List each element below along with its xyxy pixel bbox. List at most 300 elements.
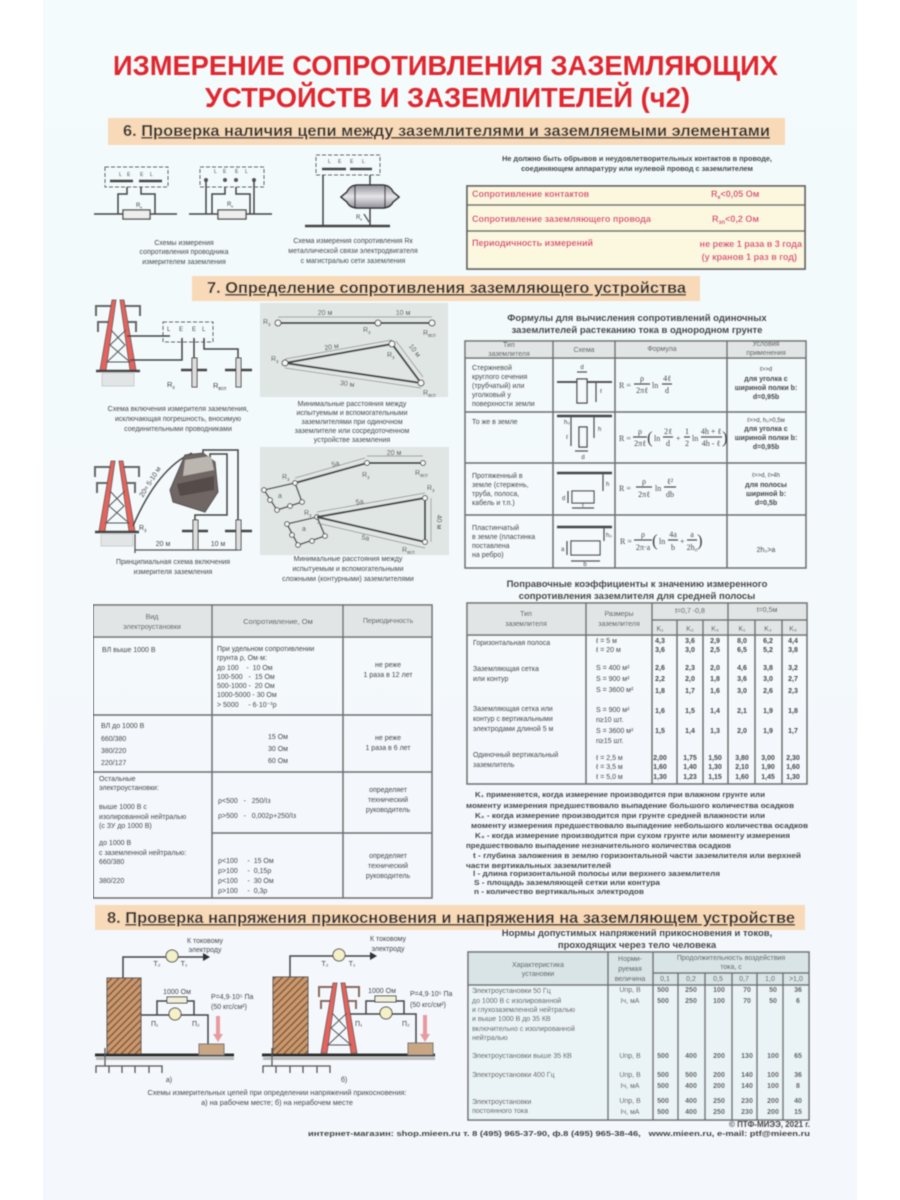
section heading 7: 7. Определение сопротивления заземляющего устройства: [207, 280, 686, 297]
coefficient values: 1,30: [708, 764, 722, 771]
diagram: principal meter connection: 10 м: [211, 541, 225, 548]
coefficient values: 1,6: [655, 708, 665, 715]
caption: conductor circuits: сопротивления проводника: [140, 249, 229, 256]
panel: minimum distances complex electrode: з: [367, 475, 370, 481]
panel: minimum distances single electrode: 20 м: [324, 343, 340, 352]
panel: minimum distances single electrode: з: [276, 359, 279, 365]
diagram: conductor measurement circuit 1: R: [136, 203, 140, 209]
diagram: conductor measurement circuit 1: [94, 167, 177, 219]
formulas: ln: [655, 484, 661, 493]
requirements box: <0,05 Ом: [721, 189, 760, 199]
header: установки: [522, 971, 554, 978]
coefficient values: 1,7: [685, 688, 695, 695]
diagram b: touch voltage at non-work place: T₁: [349, 961, 356, 968]
icon: voltmeter: [169, 1008, 181, 1020]
conditions column: для уголка с: [744, 426, 788, 433]
header: величина: [615, 976, 645, 983]
conditions column: ℓ>>d: [760, 366, 772, 373]
installation types: ВЛ до 1000 В: [101, 723, 145, 730]
values: 100: [713, 987, 725, 994]
values: 230: [741, 1098, 753, 1105]
scheme sketches: h₀: [564, 420, 570, 426]
table: resistance norms: [93, 605, 432, 898]
table header: [488, 341, 786, 358]
values: 70: [743, 987, 751, 994]
diagram a: touch voltage at workplace: 1000 Ом: [163, 989, 191, 996]
resistance values: 100-500 - 15 Ом: [217, 674, 275, 681]
panel: minimum distances single electrode: з: [368, 330, 371, 336]
diagram: tower with meter: L: [202, 327, 206, 333]
earth electrode types: [473, 640, 558, 769]
diagram: tower with meter: R: [167, 380, 172, 389]
diagram b: touch voltage at non-work place: П₁: [355, 1021, 363, 1028]
coefficient values: 3,0: [763, 676, 773, 683]
values: 500: [657, 1109, 669, 1116]
resistance values: ρ<500 - 250/Iз: [218, 798, 271, 805]
coefficient values: 1,90: [761, 764, 775, 771]
section heading 8: 8. Проверка напряжения прикосновения и напряжения на заземляющем устройстве: [107, 910, 795, 927]
formulas: R =: [620, 537, 632, 546]
electrode sizes: S = 900 м²: [596, 676, 630, 683]
coefficient values: 1,15: [708, 774, 722, 781]
electrode sizes: S = 3600 м²: [596, 687, 634, 694]
scheme sketches: b: [583, 562, 587, 568]
coefficient values: 5,2: [763, 647, 773, 654]
diagram b: touch voltage at non-work place: электроду: [372, 946, 405, 953]
electrode type column: в земле (пластинка: [472, 534, 535, 541]
notes on coefficients: части вертикальных заземлителей: [466, 862, 611, 870]
values: Uпр, В: [619, 1053, 641, 1060]
coefficient values: 3,2: [788, 665, 798, 672]
panel: minimum distances complex electrode: 20 м: [387, 450, 401, 457]
diagram: conductor measurement circuit 2: к: [231, 204, 233, 208]
earth electrode types: Одиночный вертикальный: [473, 751, 558, 759]
formulas: ): [722, 428, 728, 447]
electrode sizes: ℓ = 2,5 м: [595, 755, 623, 762]
caption: principal connection: Принципиальная схема включения: [116, 559, 230, 566]
values: 250: [685, 987, 697, 994]
diagram: conductor measurement circuit 1: E: [127, 172, 131, 178]
electrode type column: Протяженный в: [472, 472, 523, 480]
diagram: vessel measurement circuit: R: [356, 215, 360, 221]
panel: minimum distances single electrode: R: [423, 330, 428, 337]
requirements box: R: [712, 214, 718, 224]
diagram: principal meter connection: 20≈ 5-10 м: [139, 466, 163, 499]
installation characteristics: Электроустановки: [472, 1099, 531, 1106]
values: 70: [743, 998, 751, 1005]
installation characteristics: [472, 988, 575, 1115]
caption: conductor circuits: Схемы измерения: [154, 240, 214, 247]
header: 0,1: [660, 976, 670, 983]
panel: minimum distances single electrode: R: [363, 327, 368, 334]
note on continuity: Не должно быть обрывов и неудовлетворительных контактов в проводе,: [502, 154, 772, 163]
values: 100: [767, 1053, 779, 1060]
electrode type column: земле (стержень,: [472, 482, 529, 489]
formulas: 4h + ℓ: [701, 427, 721, 436]
coefficient values: 2,3: [788, 688, 798, 695]
values: Uпр, В: [619, 1098, 641, 1105]
coefficient values: 4,6: [737, 665, 747, 672]
values: 50: [769, 987, 777, 994]
coefficient values: 2,0: [710, 665, 720, 672]
diagram: conductor measurement circuit 2: E: [223, 169, 227, 175]
values: Iч, мА: [621, 1109, 640, 1116]
caption: single electrode distances: Минимальные расстояния между: [298, 401, 407, 408]
table: correction coefficients: [467, 603, 807, 784]
electrode type column: [472, 364, 535, 559]
formulas: +: [680, 537, 685, 546]
formulas: ): [697, 531, 703, 550]
formulas: db: [666, 490, 674, 499]
earth electrode types: или контур: [473, 676, 508, 683]
diagram b: touch voltage at non-work place: (50 кгс/см²): [410, 1002, 446, 1009]
icon: transmission tower 1: [96, 300, 140, 386]
resistance values: ρ<100 - 15 Ом: [218, 858, 274, 865]
diagram: conductor measurement circuit 1: E: [140, 172, 144, 178]
formulas: 2ℓ: [664, 427, 672, 436]
caption: principal connection: измерителя заземления: [134, 569, 213, 576]
header: K₁: [738, 626, 746, 633]
coefficient values: 3,0: [685, 647, 695, 654]
header: K₂: [764, 626, 772, 633]
panel: minimum distances single electrode: 20 м: [318, 310, 332, 317]
header: [512, 954, 803, 983]
panel: minimum distances complex electrode: з: [309, 513, 312, 519]
header: t=0,7 -0,8: [675, 608, 705, 615]
scheme sketches: ℓ: [582, 502, 584, 509]
caption: principal connection: [116, 559, 230, 576]
caption: single electrode distances: устройстве заземления: [314, 436, 390, 444]
resistance values: 15 Ом: [268, 734, 288, 741]
values: 200: [767, 1109, 779, 1116]
header: тока, с: [720, 964, 742, 971]
requirements box: Периодичность измерений: [472, 238, 593, 248]
formulas: 2: [685, 439, 689, 448]
values: 500: [657, 998, 669, 1005]
values: 500: [657, 1053, 669, 1060]
coefficient values: 3,8: [763, 665, 773, 672]
title: [113, 50, 778, 113]
electrode type column: кабель и т.п.): [472, 499, 515, 507]
formulas: d: [666, 439, 670, 448]
coefficient values: 1,5: [685, 708, 695, 715]
diagram b: touch voltage at non-work place: П₂: [402, 1021, 410, 1028]
periodicity: 1 раза в 12 лет: [364, 672, 413, 679]
diagram: tower with meter: всп: [218, 386, 227, 392]
values: 200: [767, 1098, 779, 1105]
electrode type column: труба, полоса,: [472, 490, 519, 498]
header: заземлителя: [598, 621, 640, 628]
formulas: a: [690, 530, 694, 539]
values: 400: [685, 1083, 697, 1090]
resistance values: до 100 - 10 Ом: [217, 665, 273, 672]
diagram a: touch voltage at workplace: Р=4,9·10⁵ Па: [211, 994, 253, 1001]
values: 200: [713, 1072, 725, 1079]
earth electrode types: Горизонтальная полоса: [473, 640, 550, 647]
resistance values: грунта ρ, Ом·м:: [217, 655, 267, 662]
formulas: +: [676, 434, 681, 443]
coefficient values: 1,60: [735, 774, 749, 781]
heading: correction coefficients: Поправочные коэффициенты к значению измеренного: [507, 579, 768, 590]
heading: correction coefficients: [507, 579, 768, 602]
panel: minimum distances complex electrode: R: [427, 485, 432, 492]
header: 0,7: [739, 976, 749, 983]
diagram: conductor measurement circuit 1: L: [119, 172, 122, 178]
header: K₁: [656, 626, 664, 633]
section heading 6: [108, 118, 785, 145]
values: Iч, мА: [621, 1083, 640, 1090]
panel: minimum distances single electrode: з: [268, 322, 271, 328]
values: 65: [794, 1053, 802, 1060]
values: 8: [796, 1083, 800, 1090]
requirements box: Сопротивление контактов: [472, 189, 590, 199]
electrode sizes: ℓ = 5 м: [595, 638, 617, 645]
values: 250: [713, 1109, 725, 1116]
coefficient values: 2,1: [737, 708, 747, 715]
requirements box: не реже 1 раза в 3 года: [700, 239, 803, 249]
header: заземлителя: [505, 621, 547, 628]
installation characteristics: и выше 1000 В до 35 КВ: [472, 1016, 551, 1023]
installation types: [99, 647, 186, 885]
diagram: principal meter connection: R: [139, 525, 144, 532]
caption: complex electrode distances: Минимальные расстояния между: [294, 556, 403, 563]
diagram b: touch voltage at non-work place: [262, 936, 452, 1084]
electrode sizes: ℓ = 20 м: [595, 647, 621, 654]
coefficient values: 1,40: [683, 764, 697, 771]
installation types: 380/220: [101, 748, 126, 755]
coefficient values: 1,60: [653, 764, 667, 771]
notes on coefficients: K₁ применяется, когда измерение производится при влажном грунте или: [475, 792, 765, 799]
coefficient values: 2,0: [685, 676, 695, 683]
scheme sketches: h: [598, 427, 601, 433]
coefficient values: 1,8: [710, 676, 720, 683]
resistance values: > 5000 - 6·10⁻³ρ: [217, 702, 277, 709]
header: >1,0: [789, 976, 803, 983]
electrode type column: поставлена: [472, 543, 510, 550]
resistance values: ρ<100 - 30 Ом: [218, 878, 274, 885]
periodicity: не реже: [375, 662, 401, 669]
resistance values: 500-1000 - 20 Ом: [217, 683, 275, 690]
caption: touch voltage circuits: [147, 1088, 407, 1107]
coefficient values: 1,7: [788, 728, 798, 735]
conditions column: ℓ>>d, ℓ>4h: [752, 472, 780, 479]
notes on coefficients: моменту измерения предшествовало выпадение небольшого количества осадков: [471, 822, 809, 830]
coefficient values: 2,7: [788, 676, 798, 683]
coefficient values: 1,8: [655, 688, 665, 695]
caption: vessel circuit: Схема измерения сопротивления Rк: [293, 238, 414, 245]
values: Iч, мА: [621, 998, 640, 1005]
panel: minimum distances complex electrode: 5a: [361, 534, 370, 543]
coefficient values: 8,0: [737, 638, 747, 645]
values: 500: [657, 1098, 669, 1105]
notes on coefficients: K₃ - когда измерение производится при сухом грунте или моменту измерения: [475, 833, 790, 840]
caption: vessel circuit: [288, 238, 418, 265]
values: 200: [713, 1053, 725, 1060]
coefficient values: 1,30: [653, 774, 667, 781]
values: 50: [769, 998, 777, 1005]
formulas: 4a: [669, 530, 677, 539]
resistance values: 1000-5000 - 30 Ом: [217, 692, 277, 699]
panel: minimum distances complex electrode: [260, 447, 449, 556]
periodicity: не реже: [375, 735, 401, 742]
coefficient values: 2,6: [763, 688, 773, 695]
table: touch voltage norms: [468, 952, 809, 1120]
panel: minimum distances single electrode: 10 м: [396, 310, 410, 317]
values: 6: [796, 998, 800, 1005]
icon: earth resistance meter device: [170, 453, 218, 512]
installation types: с заземленной нейтралью:: [99, 849, 186, 857]
periodicity: определяет: [369, 853, 408, 860]
caption: conductor circuits: измерителем заземления: [142, 259, 226, 266]
panel: minimum distances complex electrode: з: [432, 488, 435, 494]
panel: minimum distances complex electrode: 40 м: [435, 515, 442, 529]
values: 250: [685, 998, 697, 1005]
periodicity: 1 раза в 6 лет: [365, 745, 411, 752]
title: ИЗМЕРЕНИЕ СОПРОТИВЛЕНИЯ ЗАЗЕМЛЯЮЩИХ: [113, 50, 778, 81]
panel: minimum distances single electrode: всп: [428, 333, 436, 339]
values: 250: [713, 1098, 725, 1105]
header: Продолжительность воздействия: [677, 954, 785, 962]
caption: single electrode distances: испытуемым и вспомогательными: [296, 410, 408, 417]
caption: complex electrode distances: сложными (контурными) заземлителями: [282, 576, 414, 583]
coefficient values: 2,3: [685, 665, 695, 672]
header: электроустановки: [123, 624, 181, 631]
icon: transmission tower 3: [319, 983, 359, 1053]
table header: Тип: [503, 342, 515, 349]
section heading 8: [95, 905, 805, 930]
values: [619, 987, 802, 1116]
diagram: conductor measurement circuit 2: L: [214, 169, 217, 175]
formulas: 4h - ℓ: [702, 439, 720, 448]
values: 130: [741, 1053, 753, 1060]
header: K₂: [686, 626, 694, 633]
installation types: изолированной нейтралью: [99, 813, 186, 821]
heading: norms: проходящих через тело человека: [558, 940, 717, 951]
caption: single electrode distances: заземлителями при одиночном: [301, 419, 403, 426]
scheme sketches: [557, 365, 612, 568]
panel: minimum distances complex electrode: всп: [420, 473, 428, 479]
caption: error-free meter connection: [108, 406, 248, 433]
formulas: 2πℓ: [638, 490, 650, 499]
resistance values: При удельном сопротивлении: [217, 646, 314, 653]
conditions column: d=0,95b: [753, 394, 779, 401]
coefficient values: 1,30: [786, 774, 800, 781]
diagram a: touch voltage at workplace: T₁: [181, 961, 188, 968]
requirements box: R: [711, 189, 718, 199]
periodicity: определяет: [369, 787, 408, 794]
values: 400: [685, 1098, 697, 1105]
values: 36: [794, 1072, 802, 1079]
scheme sketches: d: [581, 455, 585, 461]
coefficient values: 2,6: [655, 665, 665, 672]
formulas: 2πℓ: [636, 386, 648, 395]
periodicity: технический: [368, 862, 408, 870]
values: 500: [657, 987, 669, 994]
scheme sketches: h: [606, 482, 609, 488]
coefficient values: 2,00: [653, 755, 667, 762]
icon: transmission tower 2: [95, 461, 139, 546]
header: [123, 614, 413, 631]
values: 100: [767, 1072, 779, 1079]
earth electrode types: контур с вертикальными: [473, 716, 553, 723]
values: 400: [685, 1109, 697, 1116]
formulas: 2h₀: [687, 543, 698, 552]
values: 36: [794, 987, 802, 994]
conditions column: для уголка с: [744, 376, 788, 383]
copyright: © ПТФ-МИЭЭ, 2021 г.: [729, 1120, 810, 1129]
diagram b: touch voltage at non-work place: Р=4,9·10⁵ Па: [410, 991, 452, 998]
electrode sizes: n≥15 шт.: [596, 738, 624, 745]
panel: minimum distances single electrode: 30 м: [340, 380, 355, 389]
caption: conductor circuits: [140, 240, 229, 266]
header: Характеристика: [512, 962, 564, 969]
table header: Схема: [573, 347, 595, 354]
heading: norms: [502, 928, 772, 951]
diagram b: touch voltage at non-work place: 1000 Ом: [368, 988, 396, 995]
formulas: ln: [692, 434, 698, 443]
diagram b: touch voltage at non-work place: T₂: [322, 961, 329, 968]
formulas: 2πℓ: [634, 439, 646, 448]
header: Сопротивление, Ом: [243, 617, 313, 626]
diagram b: touch voltage at non-work place: б): [341, 1076, 347, 1084]
panel: minimum distances complex electrode: R: [304, 510, 309, 517]
diagram: principal meter connection: 20 м: [156, 541, 170, 548]
coefficient values: 1,9: [763, 728, 773, 735]
diagram: vessel measurement circuit: к: [360, 216, 362, 222]
values: 230: [741, 1109, 753, 1116]
icon: ammeter: [166, 950, 178, 962]
diagram: conductor measurement circuit 2: R: [227, 202, 231, 208]
values: 140: [741, 1083, 753, 1090]
formulas: ρ: [641, 530, 645, 539]
header: Периодичность: [363, 618, 413, 625]
caption: single electrode distances: заземлителе или сосредоточенном: [295, 428, 410, 435]
electrode type column: Стержневой: [472, 364, 512, 372]
table: electrode formulas: [465, 341, 806, 568]
diagram a: touch voltage at workplace: [95, 938, 253, 1084]
coefficient values: 1,4: [710, 708, 720, 715]
formulas: R =: [619, 434, 631, 443]
coefficient values: 2,30: [786, 755, 800, 762]
coefficient values: 1,8: [788, 708, 798, 715]
diagram: vessel measurement circuit: L: [362, 159, 365, 165]
resistance values: 30 Ом: [268, 746, 288, 753]
heading: formulas: Формулы для вычисления сопротивлений одиночных: [507, 313, 767, 324]
installation types: (с ЗУ до 1000 В): [99, 823, 152, 830]
caption: complex electrode distances: испытуемым и вспомогательными: [292, 566, 404, 573]
section heading 6: 6. Проверка наличия цепи между заземлителями и заземляемыми элементами: [123, 123, 770, 140]
panel: minimum distances single electrode: R: [271, 356, 276, 363]
coefficient values: 3,00: [761, 755, 775, 762]
table header: заземлителя: [488, 351, 530, 358]
caption: error-free meter connection: соединительными проводниками: [124, 426, 232, 433]
installation types: выше 1000 В с: [99, 804, 147, 811]
resistance values: 60 Ом: [268, 758, 288, 765]
header: Норми-: [618, 956, 643, 963]
panel: minimum distances complex electrode: R: [282, 474, 287, 481]
conditions column: для полосы: [745, 482, 787, 489]
coefficient values: 3,6: [685, 638, 695, 645]
footer contacts: интернет-магазин: shop.mieen.ru т. 8 (495) 965-37-90, ф.8 (495) 965-38-46, www.mieen.ru, e-mail: ptf@mieen.ru: [308, 1129, 811, 1138]
electrode sizes: S = 3600 м²: [596, 728, 634, 735]
installation characteristics: Электроустановки 50 Гц: [472, 988, 551, 995]
diagram a: touch voltage at workplace: П₁: [151, 1021, 159, 1028]
requirements box: к: [718, 195, 721, 201]
diagram: principal meter connection: з: [144, 528, 147, 534]
formulas: ρ: [642, 477, 646, 486]
installation types: ВЛ выше 1000 В: [102, 647, 156, 654]
values: 200: [713, 1083, 725, 1090]
